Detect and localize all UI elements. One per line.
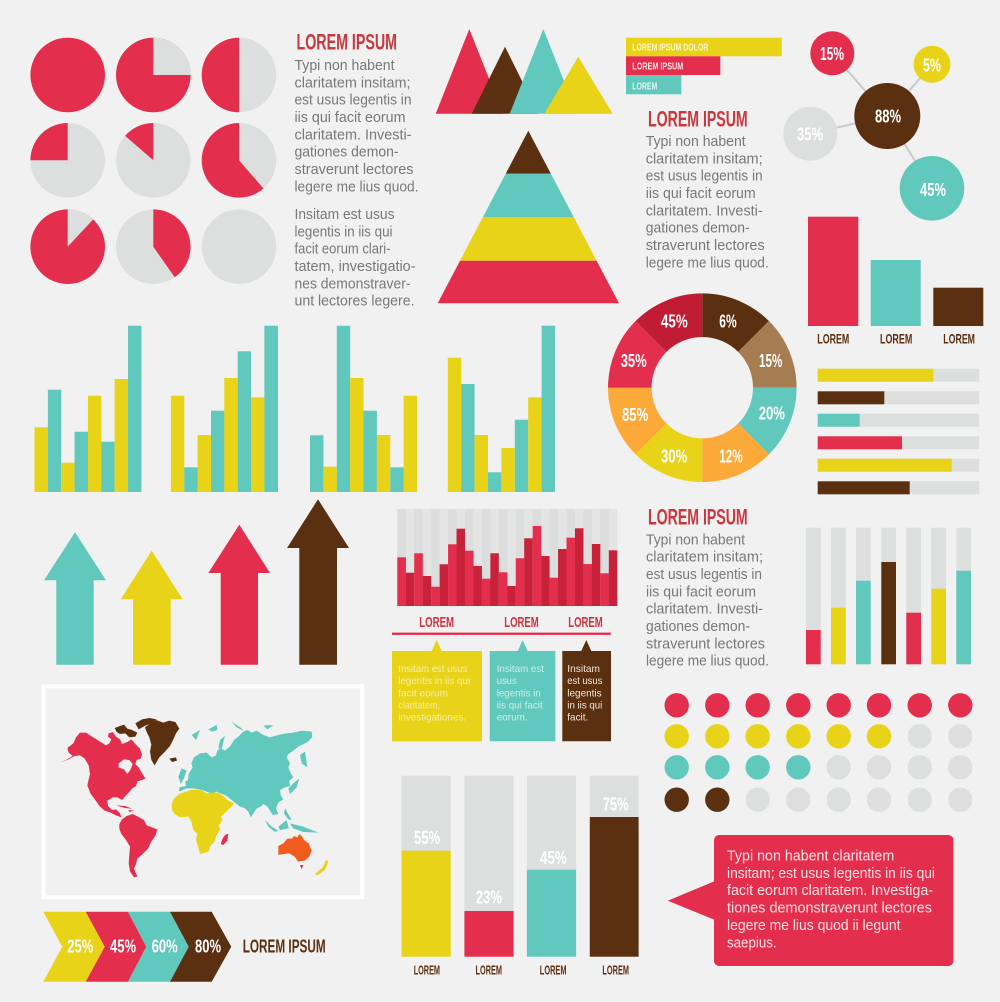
- chart: bar group 3: [310, 326, 417, 492]
- pie 3: half: [202, 38, 276, 112]
- chart: connected percentage bubbles: 35%: [797, 125, 823, 145]
- pie 9: empty: [202, 209, 276, 284]
- pie 4: quarter: [30, 123, 105, 198]
- callout: yellow note: facit eorum: [398, 687, 448, 699]
- pie 7: most filled: [30, 209, 105, 284]
- callout: red speech bubble: facit eorum claritatem. Investiga-: [727, 883, 933, 899]
- label: chevron caption: LOREM IPSUM: [243, 936, 326, 956]
- callout: yellow note: Insitam est usus: [398, 663, 467, 675]
- chart: chevron process: 25%: [67, 936, 93, 956]
- chart: stacked percentage columns: 23%: [476, 887, 502, 907]
- callout: brown note: in iis qui: [567, 700, 602, 712]
- text block: upper middle paragraph: Typi non habent: [646, 134, 746, 150]
- callout: red speech bubble: insitam; est usus legentis in iis qui: [727, 866, 935, 882]
- text block: first paragraph: est usus legentis in: [294, 93, 412, 109]
- chart: chevron process: 80%: [195, 936, 221, 956]
- text block: lower right paragraph: claritatem insitam;: [646, 550, 763, 566]
- text block: upper middle paragraph: [646, 134, 769, 271]
- map: new zealand: [315, 859, 328, 875]
- legend: three labelled ribbons: LOREM: [632, 81, 657, 92]
- text block: upper middle paragraph: straverunt lectores: [646, 238, 765, 254]
- map: north america: [59, 732, 145, 817]
- map: africa: [172, 789, 234, 854]
- chart: donut with eight segments: 35%: [621, 351, 647, 371]
- chart: three labelled columns: LOREM: [817, 330, 849, 346]
- chart: connected percentage bubbles: [783, 31, 964, 221]
- text block: second paragraph: nes demonstraver-: [294, 276, 411, 292]
- text block: upper middle paragraph: iis qui facit eorum: [646, 186, 756, 202]
- text block: lower right paragraph: legere me lius quod.: [646, 654, 769, 670]
- chart: donut with eight segments: 12%: [719, 446, 743, 466]
- map: tasmania: [300, 865, 303, 869]
- callout: brown note: est usus: [567, 675, 602, 687]
- chart: donut with eight segments: 6%: [719, 312, 737, 332]
- callout: yellow note: claritatem,: [398, 700, 440, 712]
- chart: dot matrix: [664, 693, 972, 812]
- text block: second paragraph: facit eorum clari-: [294, 242, 391, 258]
- callout: brown note: facit.: [567, 712, 588, 724]
- callout: teal note: [490, 640, 555, 741]
- text block: upper middle paragraph: gationes demon-: [646, 221, 750, 237]
- callout: red speech bubble: tiones demonstraverunt lectores: [727, 900, 932, 916]
- callout: teal note: Insitam est: [497, 663, 544, 675]
- pie 6: large slice: [202, 123, 276, 198]
- chart: layered pyramid: [438, 131, 619, 303]
- map: australia: [278, 834, 312, 862]
- callout: yellow note: legentis in iis qui: [398, 675, 470, 687]
- arrow: yellow: [121, 551, 183, 665]
- chart: stacked percentage columns: LOREM: [602, 963, 629, 977]
- text block: lower right paragraph: straverunt lectores: [646, 636, 765, 652]
- chart: horizontal progress bars: [818, 369, 979, 494]
- text block: second paragraph: tatem, investigatio-: [294, 259, 416, 275]
- chart: donut with eight segments: 85%: [622, 405, 648, 425]
- chart: stacked percentage columns: LOREM: [414, 963, 440, 977]
- chart: donut with eight segments: 45%: [661, 312, 688, 332]
- callout: teal note: iis qui facit: [497, 700, 543, 712]
- labels: histogram axis: LOREM: [419, 614, 454, 631]
- text block: first paragraph: claritatem insitam;: [294, 75, 410, 91]
- callout: red speech bubble: [668, 835, 953, 966]
- text block: upper middle paragraph: est usus legentis in: [646, 169, 763, 185]
- text block: lower right paragraph: claritatem. Investi-: [646, 602, 763, 618]
- text block: second paragraph: legentis in iis qui: [294, 224, 392, 240]
- labels: histogram axis: LOREM: [568, 614, 603, 631]
- callout: teal note: eorum.: [497, 712, 528, 724]
- chart: connected percentage bubbles: 88%: [875, 107, 901, 127]
- arrow: brown: [287, 499, 349, 665]
- chart: three labelled columns: [808, 217, 983, 346]
- panel: world map in white frame: [44, 686, 362, 897]
- heading: upper middle text block: LOREM IPSUM: [648, 106, 748, 131]
- callout: brown note: [562, 640, 611, 741]
- chart: donut with eight segments: 30%: [661, 446, 687, 466]
- chart: three labelled columns: LOREM: [880, 330, 912, 346]
- chart: connected percentage bubbles: 45%: [920, 180, 946, 200]
- labels: histogram axis: [392, 614, 611, 635]
- text block: lower right paragraph: Typi non habent: [646, 532, 745, 548]
- map: madagascar: [221, 834, 228, 845]
- callout: red speech bubble: Typi non habent claritatem: [727, 849, 894, 865]
- text block: first paragraph: [294, 58, 418, 195]
- chart: chevron process: 60%: [152, 936, 178, 956]
- text block: first paragraph: gationes demon-: [294, 145, 399, 161]
- legend: three labelled ribbons: LOREM IPSUM DOLOR: [632, 43, 709, 54]
- chart: bar group 2: [171, 326, 278, 492]
- text block: upper middle paragraph: claritatem. Investi-: [646, 203, 763, 219]
- chart: four overlapping triangles: [436, 29, 613, 114]
- text block: first paragraph: claritatem. Investi-: [294, 127, 412, 143]
- chart: three labelled columns: LOREM: [943, 330, 975, 346]
- text block: lower right paragraph: est usus legentis in: [646, 567, 762, 583]
- text block: first paragraph: iis qui facit eorum: [294, 110, 406, 126]
- callout: yellow note: investigationes.: [398, 712, 466, 724]
- pie 5: small slice: [116, 123, 191, 198]
- arrows: four upward arrows: [44, 499, 349, 665]
- arrow: teal: [44, 532, 106, 665]
- labels: histogram axis: LOREM: [504, 614, 539, 631]
- callout: red speech bubble: saepius.: [727, 935, 777, 951]
- callout: brown note: Insitam: [567, 663, 600, 675]
- chart: red histogram on grey stripes: [397, 509, 617, 606]
- chart: stacked percentage columns: 75%: [603, 795, 629, 815]
- callout: teal note: legentis in: [497, 687, 541, 699]
- map: south america: [119, 814, 157, 877]
- chart: connected percentage bubbles: 5%: [923, 55, 941, 75]
- chart: chevron process: 45%: [110, 936, 136, 956]
- chart: chevron process: [43, 912, 231, 982]
- chart: donut with eight segments: 15%: [759, 351, 782, 371]
- pie 8: forty percent: [116, 209, 191, 284]
- heading: lower right text block: LOREM IPSUM: [648, 504, 748, 529]
- chart: bar group 1: [34, 326, 141, 492]
- legend: three labelled ribbons: LOREM IPSUM: [632, 61, 683, 72]
- text block: first paragraph: straverunt lectores: [294, 162, 414, 178]
- chart: stacked percentage columns: 45%: [540, 848, 567, 868]
- callout: red speech bubble: legere me lius quod ii legunt: [727, 918, 900, 934]
- text block: lower right paragraph: iis qui facit eorum: [646, 584, 756, 600]
- text block: first paragraph: Typi non habent: [294, 58, 394, 74]
- chart: donut with eight segments: 20%: [759, 403, 785, 423]
- text block: upper middle paragraph: claritatem insitam;: [646, 151, 763, 167]
- text block: lower right paragraph: [646, 532, 769, 670]
- chart: stacked percentage columns: LOREM: [540, 963, 566, 977]
- text block: lower right paragraph: gationes demon-: [646, 619, 750, 635]
- legend: three labelled ribbons: [626, 38, 782, 94]
- callout: yellow note: [392, 640, 482, 741]
- chart: stacked percentage columns: 55%: [414, 828, 440, 848]
- heading: top left text block: LOREM IPSUM: [296, 29, 397, 54]
- text block: upper middle paragraph: legere me lius quod.: [646, 255, 769, 271]
- callout: brown note: legentis: [567, 687, 602, 699]
- arrow: red: [208, 525, 270, 665]
- map: eurasia: [178, 722, 318, 833]
- chart: stacked percentage columns: LOREM: [476, 963, 502, 977]
- map: greenland and arctic islands: [115, 718, 179, 765]
- pie 1: full: [30, 38, 105, 112]
- text block: second paragraph: Insitam est usus: [294, 207, 394, 223]
- chart: vertical progress bars: [806, 528, 971, 664]
- pie 2: three quarters: [116, 38, 191, 112]
- text block: second paragraph: unt lectores legere.: [294, 294, 414, 310]
- callout: teal note: usus: [497, 675, 517, 687]
- text block: first paragraph: legere me lius quod.: [294, 179, 418, 195]
- chart: bar group 4: [448, 326, 555, 492]
- chart: stacked percentage columns: [402, 776, 639, 977]
- chart: connected percentage bubbles: 15%: [820, 44, 844, 64]
- chart: donut with eight segments: [608, 293, 797, 482]
- panel: grid of nine pie charts: [30, 38, 276, 284]
- text block: second paragraph: [294, 207, 416, 310]
